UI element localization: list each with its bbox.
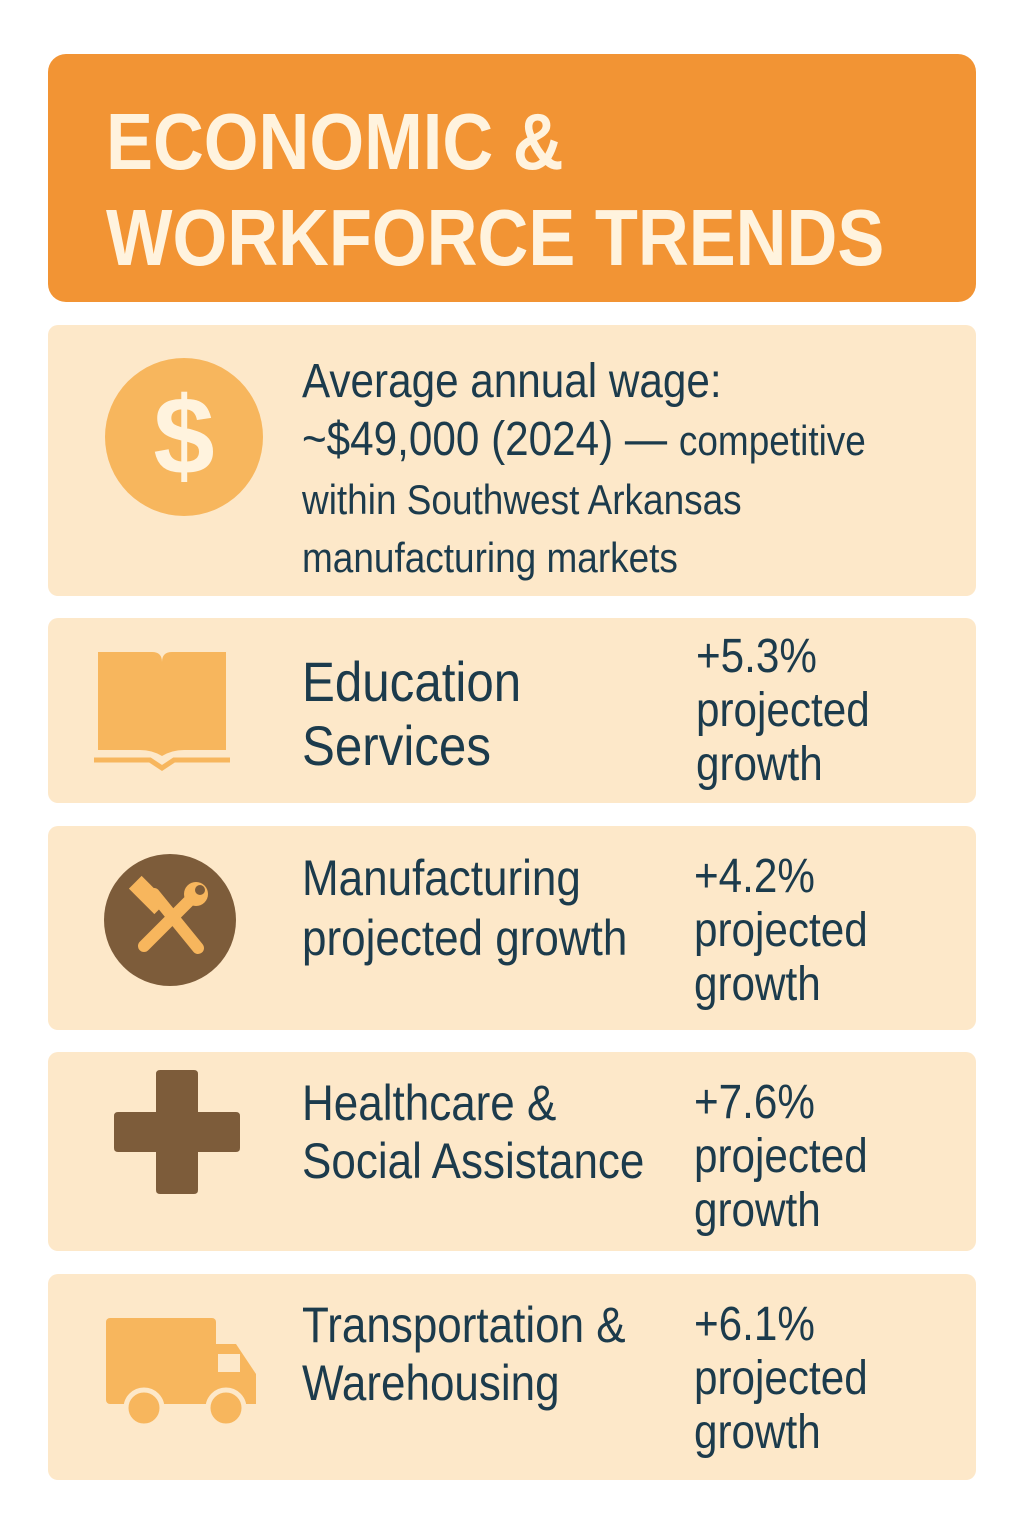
- growth value: [694, 1076, 868, 1237]
- icon: truck: [106, 1318, 256, 1424]
- growth value: +6.1%: [694, 1298, 815, 1351]
- title: WORKFORCE TRENDS: [106, 193, 884, 282]
- panel: transportation: [48, 1274, 976, 1480]
- label: Education: [302, 650, 521, 713]
- icon: medical cross: [114, 1070, 240, 1194]
- panel: education services: [48, 618, 976, 803]
- growth value: projected: [694, 1130, 868, 1183]
- wage text: manufacturing markets: [302, 534, 678, 581]
- panel: average wage: [48, 325, 976, 596]
- growth value: +7.6%: [694, 1076, 815, 1129]
- label: [302, 850, 627, 966]
- label: Manufacturing: [302, 850, 581, 906]
- label: projected growth: [302, 910, 627, 966]
- label: Services: [302, 714, 491, 777]
- growth value: [694, 850, 868, 1011]
- growth value: growth: [694, 1184, 821, 1237]
- wage text: Average annual wage:: [302, 355, 722, 408]
- growth value: +5.3%: [696, 630, 817, 683]
- growth value: projected: [694, 904, 868, 957]
- icon: dollar coin: $: [153, 375, 215, 498]
- wage text: [302, 355, 866, 581]
- title: ECONOMIC &: [106, 97, 564, 186]
- label: [302, 1297, 626, 1411]
- growth value: growth: [694, 958, 821, 1011]
- label: Transportation &: [302, 1297, 626, 1353]
- panel: manufacturing: [48, 826, 976, 1030]
- label: Warehousing: [302, 1355, 560, 1411]
- title: [106, 97, 884, 282]
- growth value: [694, 1298, 868, 1459]
- growth value: [696, 630, 870, 791]
- wage text: ~$49,000 (2024) — competitive: [302, 413, 866, 466]
- growth value: projected: [694, 1352, 868, 1405]
- header banner: [48, 54, 976, 302]
- label: Healthcare &: [302, 1075, 556, 1131]
- growth value: projected: [696, 684, 870, 737]
- label: [302, 1075, 644, 1189]
- label: [302, 650, 521, 777]
- label: Social Assistance: [302, 1133, 644, 1189]
- panel: healthcare: [48, 1052, 976, 1251]
- icon: tools: [104, 854, 236, 986]
- growth value: +4.2%: [694, 850, 815, 903]
- growth value: growth: [694, 1406, 821, 1459]
- icon: book: [94, 652, 230, 771]
- wage text: within Southwest Arkansas: [302, 476, 742, 523]
- growth value: growth: [696, 738, 823, 791]
- icon: dollar coin: [105, 358, 263, 516]
